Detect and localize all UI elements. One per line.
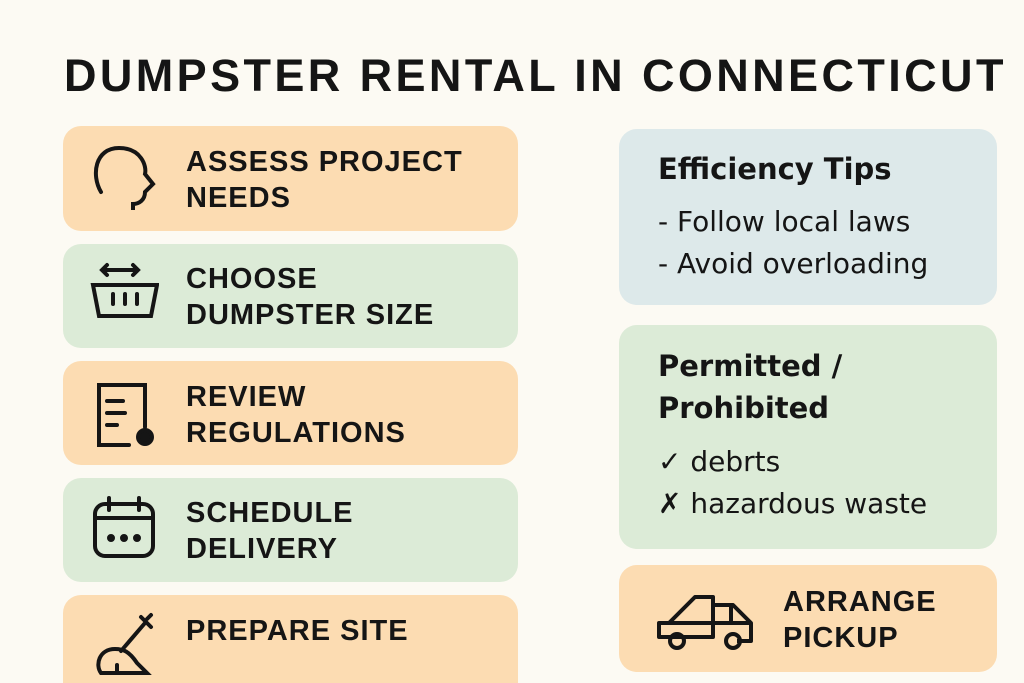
panel: arrange pickup (619, 565, 997, 672)
icon: basket (90, 262, 159, 318)
text (186, 263, 434, 331)
icon: truck (657, 595, 753, 650)
text: PICKUP (783, 622, 899, 654)
panel: prepare site (63, 595, 518, 683)
text (186, 381, 406, 449)
text: REVIEW (186, 381, 306, 413)
text (783, 586, 937, 654)
text: REGULATIONS (186, 417, 406, 449)
heading: Permitted / (658, 349, 842, 383)
tips list (658, 205, 928, 280)
text (186, 146, 463, 214)
panel: assess project needs (63, 126, 518, 231)
text: NEEDS (186, 182, 291, 214)
list: ✗ hazardous waste (658, 487, 927, 520)
heading: Prohibited (658, 391, 829, 425)
heading: Efficiency Tips (658, 152, 892, 186)
text: SCHEDULE (186, 497, 354, 529)
tips list: - Follow local laws (658, 205, 910, 238)
tips list: - Avoid overloading (658, 247, 928, 280)
title: DUMPSTER RENTAL IN CONNECTICUT (64, 50, 1007, 101)
text: ASSESS PROJECT (186, 146, 463, 178)
icon: calendar (93, 496, 155, 558)
text: DUMPSTER SIZE (186, 299, 434, 331)
text: PREPARE SITE (186, 615, 409, 647)
panel: permitted/prohibited (619, 325, 997, 549)
icon: shovel (96, 612, 154, 675)
text: CHOOSE (186, 263, 318, 295)
panel: schedule delivery (63, 478, 518, 582)
text (186, 497, 354, 565)
icon: head (94, 146, 156, 210)
panel: efficiency tips (619, 129, 997, 305)
text: DELIVERY (186, 533, 338, 565)
list (658, 445, 927, 520)
list: ✓ debrts (658, 445, 780, 478)
panel: review regulations (63, 361, 518, 465)
heading (658, 349, 842, 425)
icon: document (97, 383, 154, 447)
text: ARRANGE (783, 586, 937, 618)
panel: choose size (63, 244, 518, 348)
